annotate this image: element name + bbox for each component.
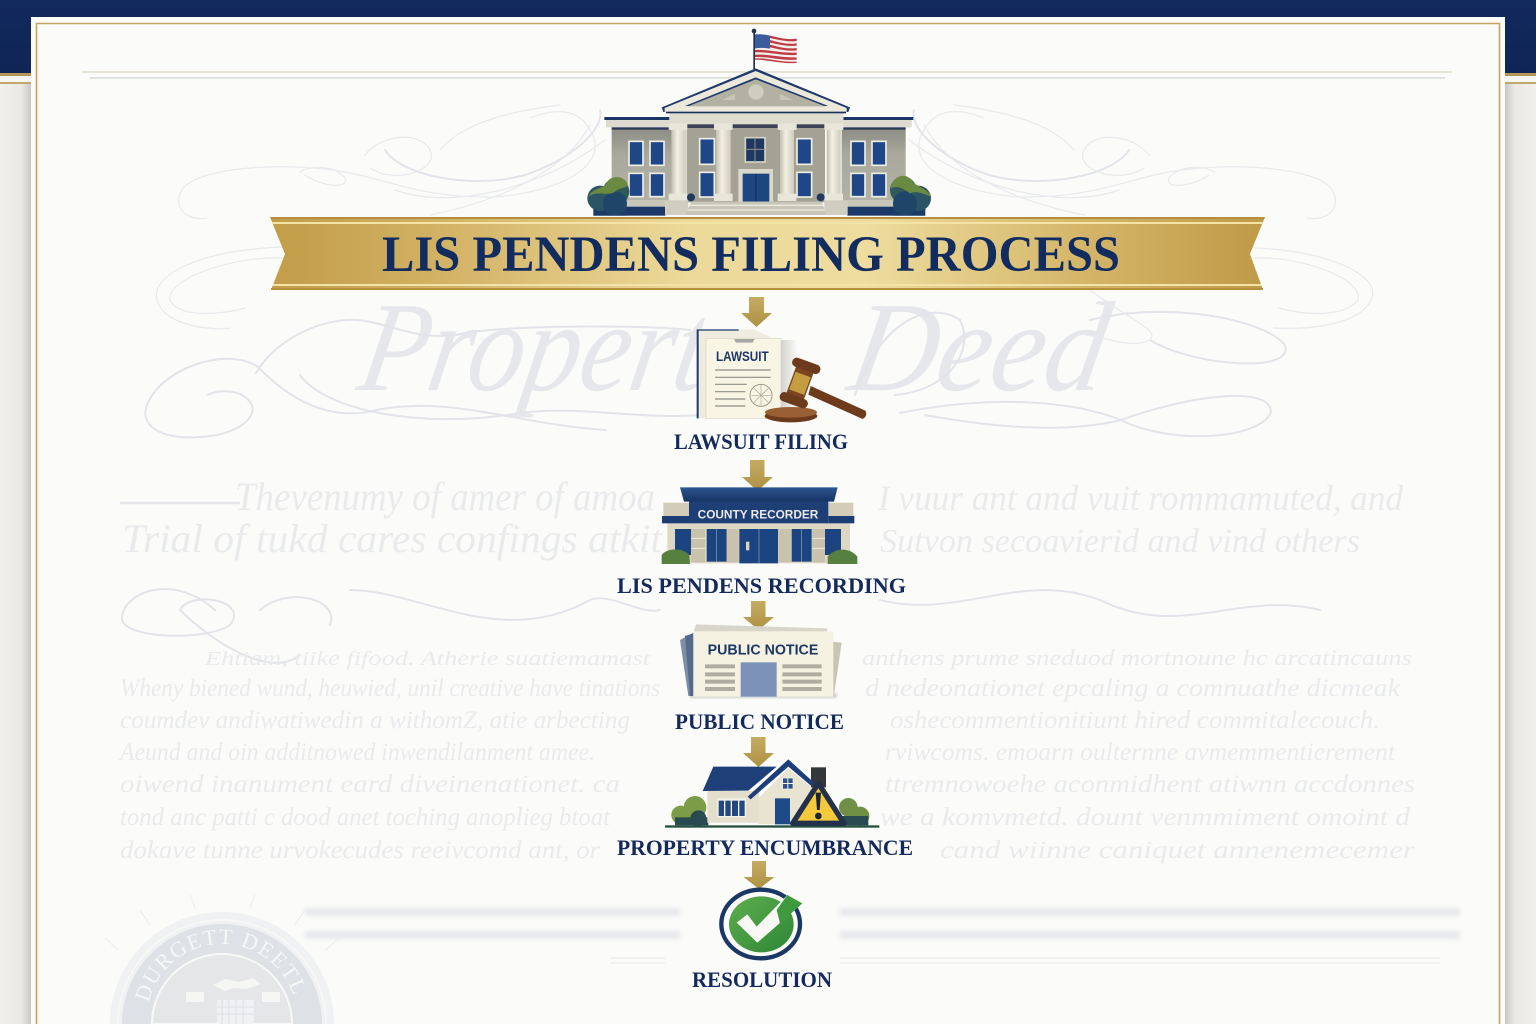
watermark: calligraphic text block (118, 474, 1460, 963)
watermark: calligraphic text block: oiwend inanument eard diveinenationet. ca (120, 771, 620, 798)
watermark: Property Deed script: Propert (349, 276, 723, 418)
portico (662, 68, 850, 202)
watermark: calligraphic text block: cand wiinne caniquet annenemecemer (940, 837, 1415, 864)
icon: county recorder building (662, 487, 857, 564)
arrow 2 (742, 460, 773, 491)
watermark: calligraphic text block: dokave tunne urvokecudes reeivcomd ant, or (120, 837, 600, 864)
watermark: calligraphic text block: Wheny biened wund, heuwied, unil creative have tinations (120, 675, 660, 702)
watermark: calligraphic text block: Sutvon secoavierid and vind others (880, 523, 1360, 560)
step label: property encumbrance: PROPERTY ENCUMBRANCE (617, 835, 913, 860)
watermark: embossed seal (105, 895, 340, 1024)
watermark: calligraphic text block: tond anc patti c dood anet toching anoplieg btoat (120, 804, 611, 831)
icon: public notice newspaper (680, 624, 842, 698)
warning triangle (793, 783, 844, 823)
recorder sign: COUNTY RECORDER (698, 507, 818, 521)
watermark: Property Deed script (145, 276, 1286, 438)
columns (669, 123, 843, 201)
watermark: calligraphic text block: d nedeonationet epcaling a comnuathe dicmeak (865, 675, 1401, 702)
watermark: calligraphic text block: anthens prume sneduod mortnoune hc arcatincauns (862, 645, 1412, 670)
arrow 1 (741, 297, 772, 327)
title banner (270, 217, 1265, 290)
watermark: top flourishes (156, 105, 1373, 329)
watermark: calligraphic text block: Thevenumy of amer of amoa (235, 474, 655, 519)
watermark: calligraphic text block: Trial of tukd cares confings atkit (122, 516, 663, 561)
icon: courthouse with flag (587, 29, 931, 216)
bushes (587, 176, 931, 216)
arrow 5 (744, 861, 774, 889)
document: LAWSUIT (716, 348, 769, 364)
step label: public notice: PUBLIC NOTICE (675, 709, 844, 734)
icon: american flag (752, 29, 797, 69)
watermark: calligraphic text block: we a komvmetd. dount venmmiment omoint d (880, 804, 1411, 831)
watermark: calligraphic text block: oshecommentionitiunt hired commitalecouch. (890, 707, 1380, 734)
icon: resolution check badge (721, 890, 802, 958)
icon: house with warning sign (665, 759, 879, 828)
arrow 3 (743, 601, 774, 630)
watermark: calligraphic text block: ttremnowoehe aconmidhent atiwnn accdonnes (885, 771, 1415, 798)
left and right wings (593, 117, 925, 216)
watermark: calligraphic text block: coumdev andiwatiwedin a withomZ, atie arbecting (120, 707, 630, 734)
steps (665, 193, 848, 215)
watermark: embossed seal: DURGETT DEETL (135, 930, 304, 1002)
windows (629, 138, 886, 197)
watermark: calligraphic text block: Aeund and oin additnowed inwendilanment amee. (118, 739, 595, 766)
step label: lawsuit filing: LAWSUIT FILING (674, 429, 848, 454)
watermark: calligraphic text block: I vuur ant and vuit rommamuted, and (877, 478, 1404, 518)
step label: resolution: RESOLUTION (692, 967, 832, 992)
gavel (765, 356, 866, 422)
icon: lawsuit document and gavel (697, 329, 866, 422)
step label: lis pendens recording: LIS PENDENS RECORDING (617, 573, 906, 598)
icon: public notice newspaper: PUBLIC NOTICE (708, 642, 819, 658)
watermark: calligraphic text block: rviwcoms. emoarn oulternne avmemmentierement (885, 739, 1396, 766)
watermark: Property Deed script: Deed (838, 276, 1121, 418)
entrance door (738, 169, 773, 202)
title: LIS PENDENS FILING PROCESS (382, 227, 1120, 283)
document (697, 329, 798, 418)
recorder sign (689, 501, 828, 523)
arrow 4 (743, 737, 774, 767)
watermark: calligraphic text block: Ehtiam, tiike fifood. Atherie suatiemamast (204, 648, 651, 670)
